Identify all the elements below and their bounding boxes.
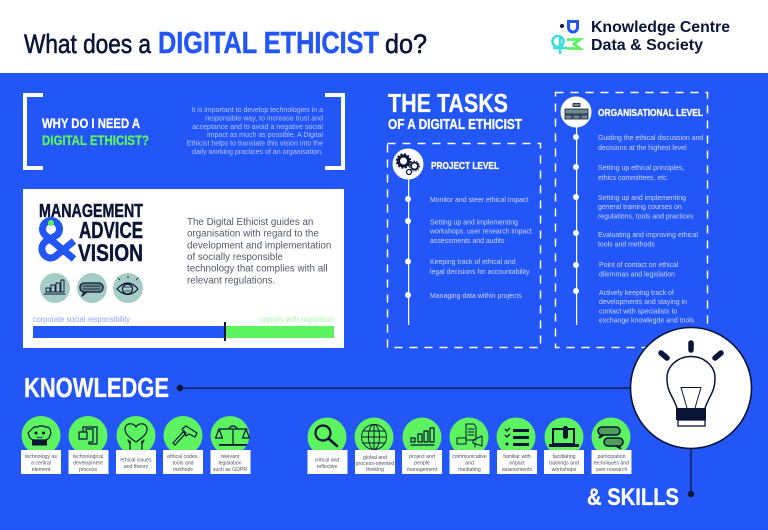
panel: project level: PROJECT LEVEL	[431, 160, 499, 172]
panel: why do I need a digital ethicist: responsible way, to increase trust and	[205, 116, 323, 122]
knowledge item: technological development process	[68, 416, 108, 474]
text block: digital ethicist guides: technology that complies with all	[187, 264, 328, 275]
icon: gears	[392, 148, 424, 180]
knowledge item: technology as a central element: technology as	[25, 454, 57, 460]
knowledge item: technological development process: development	[73, 460, 103, 466]
task list: Point of contact on ethical	[599, 262, 679, 269]
knowledge item: relevant legislation such as GDPR: relevant	[221, 454, 240, 460]
skill item: familiar with impact assessments: assessments	[502, 467, 533, 473]
connector: knowledge to bulb	[177, 385, 632, 391]
icon: bar chart circle	[40, 273, 70, 303]
panel: management advice vision	[23, 189, 344, 348]
knowledge item: relevant legislation such as GDPR: such as GDPR	[213, 467, 247, 473]
text block: digital ethicist guides: relevant regulations.	[187, 275, 275, 286]
title: do?	[385, 29, 427, 59]
skill item: facilitating trainings and workshops: facilitating	[552, 454, 576, 460]
panel: why do I need a digital ethicist: WHY DO I NEED A	[42, 115, 140, 131]
icon: organisation chart	[560, 96, 592, 128]
heading: the tasks	[388, 88, 522, 133]
icon: light bulb	[630, 328, 752, 448]
heading: management advice vision	[39, 201, 143, 267]
task list: contact with specialists to	[599, 308, 677, 316]
panel: why do I need a digital ethicist: It is important to develop technologies in a	[191, 107, 323, 114]
task list: workshops, user research impact	[429, 228, 532, 236]
icon: heart in hands	[125, 424, 147, 450]
skill item: participation techniques and user research: techniques and	[594, 460, 629, 466]
heading: the tasks: OF A DIGITAL ETHICIST	[388, 117, 522, 133]
icon: presenter at laptop	[549, 426, 579, 447]
task list: Managing data within projects	[430, 293, 522, 300]
task list: dilemmas and legislation	[599, 272, 675, 278]
icon: crane	[79, 427, 97, 444]
knowledge item: technology as a central element: a central	[31, 460, 51, 466]
skill item: global and process-oriented thinking: thinking	[366, 467, 384, 473]
icon: document and megaphone	[457, 424, 482, 447]
icon: robot	[28, 426, 51, 446]
timeline dots	[405, 196, 411, 298]
text block: digital ethicist guides: of socially responsible	[187, 252, 283, 263]
skill item: facilitating trainings and workshops	[544, 418, 584, 474]
task list	[429, 197, 532, 300]
knowledge item: ethical issues and theory	[116, 416, 156, 474]
icon: bar chart	[411, 428, 434, 445]
knowledge item: technological development process: process	[79, 467, 97, 473]
knowledge item: ethical codes, tools and methods: tools and	[172, 460, 194, 466]
bar chart: responsibility vs regulation: comply with regulation	[260, 314, 334, 324]
heading: management advice vision: MANAGEMENT	[39, 201, 143, 221]
task list	[598, 135, 703, 324]
task list: Setting up and implementing	[430, 220, 518, 226]
bar chart: responsibility vs regulation	[33, 314, 334, 341]
skill item: familiar with impact assessments	[496, 418, 537, 474]
panel: why do I need a digital ethicist	[25, 95, 343, 168]
knowledge item: technological development process: technological	[73, 454, 103, 460]
skill item: project and people management: management	[407, 467, 438, 473]
panel: why do I need a digital ethicist: Ethicist helps to translate this vision into the	[187, 140, 323, 148]
task list: legal decisions for accountability	[430, 269, 530, 276]
task list: general training courses on	[598, 204, 682, 211]
skill item: communicative and mediating	[450, 418, 490, 474]
icon: globe	[362, 424, 386, 450]
heading: knowledge: KNOWLEDGE	[24, 372, 169, 403]
knowledge item: technology as a central element	[21, 416, 61, 474]
icon: chat bubbles	[598, 427, 623, 449]
heading: the tasks: THE TASKS	[388, 88, 508, 118]
logo: Knowledge Centre Data & Society: Data & Society	[591, 37, 703, 54]
timeline dots	[573, 134, 579, 294]
text block: digital ethicist guides: The Digital Ethicist guides an	[187, 217, 313, 228]
skill item: participation techniques and user research: user research	[596, 467, 627, 473]
icon: hammer	[173, 426, 197, 445]
knowledge item: ethical codes, tools and methods: ethical codes,	[167, 454, 199, 460]
knowledge item: ethical codes, tools and methods	[163, 416, 203, 474]
title: DIGITAL ETHICIST	[158, 25, 379, 60]
connector: bulb to skills	[688, 448, 694, 497]
skill item: project and people management: project and	[409, 454, 435, 460]
text block: digital ethicist guides	[187, 217, 331, 286]
task list: regulations, tools and practices	[598, 214, 694, 220]
skill item: global and process-oriented thinking: process-oriented	[356, 461, 394, 467]
panel: why do I need a digital ethicist: impact as much as possible. A Digital	[207, 132, 323, 139]
skill item: communicative and mediating: and	[465, 460, 474, 466]
title: What does a	[24, 29, 152, 59]
task list: developments and staying in	[599, 299, 687, 306]
icon: scales	[216, 426, 250, 444]
task list: Setting up ethical principles,	[598, 165, 684, 172]
knowledge item: relevant legislation such as GDPR: legislation	[218, 460, 242, 466]
task list: Guiding the ethical discussion and	[598, 135, 703, 142]
skill item: global and process-oriented thinking: global and	[363, 455, 387, 461]
logo: Knowledge Centre Data & Society: Knowledge Centre	[591, 19, 730, 36]
icon: magnifier	[316, 426, 337, 446]
skill item: critical and reflective: critical and	[315, 458, 340, 464]
task list: Monitor and steer ethical impact	[430, 197, 528, 204]
task list: ethics committees, etc.	[598, 175, 669, 182]
skill item: communicative and mediating: communicative	[452, 454, 487, 460]
skill item: communicative and mediating: mediating	[458, 467, 481, 473]
skill item: participation techniques and user research: participation	[598, 454, 626, 460]
knowledge item: ethical codes, tools and methods: methods	[173, 467, 193, 473]
knowledge item: ethical issues and theory: and theory	[124, 464, 149, 470]
icon: ampersand	[42, 220, 74, 259]
bar chart: responsibility vs regulation: corporate social responsibility	[33, 314, 131, 324]
skill item: facilitating trainings and workshops: workshops	[552, 467, 577, 473]
heading: management advice vision: VISION	[78, 240, 143, 267]
logo: Knowledge Centre Data & Society	[553, 19, 730, 54]
icon: eye circle	[113, 273, 143, 303]
skill item: familiar with impact assessments: impact	[509, 460, 525, 466]
panel: why do I need a digital ethicist: daily working practices of an organisation.	[192, 149, 323, 156]
skill item: project and people management	[402, 418, 442, 474]
task list: Keeping track of ethical and	[430, 259, 516, 266]
text block: digital ethicist guides: organisation with regard to the	[187, 229, 319, 240]
skill item: facilitating trainings and workshops: trainings and	[549, 460, 579, 466]
skill item: familiar with impact assessments: familiar with	[503, 454, 531, 460]
task list: assessments and audits	[430, 238, 505, 245]
skill item: project and people management: people	[414, 460, 430, 466]
panel: organisational level: ORGANISATIONAL LEVEL	[598, 107, 703, 119]
title	[24, 25, 427, 60]
task list: exchange knowlegde and tools	[599, 318, 695, 324]
panel: why do I need a digital ethicist: DIGITAL ETHICIST?	[42, 132, 149, 148]
panel: project level	[388, 144, 540, 348]
heading: skills: & SKILLS	[587, 484, 679, 511]
task list: tools and methods	[598, 242, 655, 248]
skill item: global and process-oriented thinking	[354, 418, 395, 474]
icon: checklist	[505, 428, 529, 446]
skill item: critical and reflective: reflective	[317, 464, 337, 470]
panel: why do I need a digital ethicist: acceptance and to avoid a negative social	[192, 124, 323, 131]
task list: Evaluating and improving ethical	[598, 232, 698, 239]
panel: organisational level	[556, 92, 708, 348]
knowledge item: relevant legislation such as GDPR	[210, 416, 250, 474]
text block: digital ethicist guides: development and implementation	[187, 240, 331, 251]
skill item: critical and reflective	[308, 418, 348, 474]
knowledge item: technology as a central element: element	[32, 467, 51, 473]
skill item: participation techniques and user research	[592, 418, 632, 474]
heading: management advice vision: ADVICE	[79, 217, 143, 243]
task list: decisions at the highest level	[598, 145, 687, 152]
task list: Setting up and implementing	[598, 195, 686, 202]
task list: Actively keeping track of	[599, 290, 674, 297]
icon: speech bubble circle	[77, 273, 107, 303]
knowledge item: ethical issues and theory: ethical issues	[120, 458, 152, 464]
